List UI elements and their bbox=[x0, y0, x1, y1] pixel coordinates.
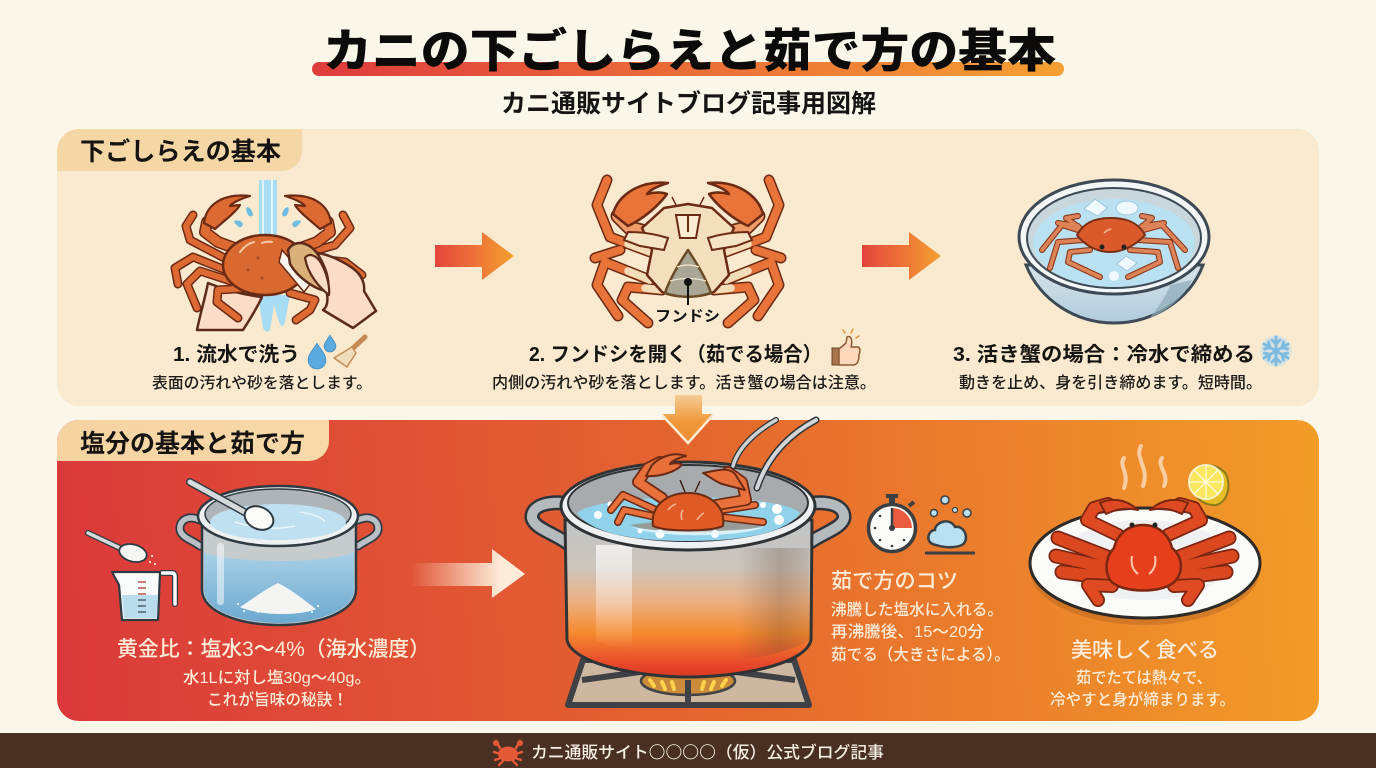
footer text: カニ通販サイト〇〇〇〇（仮）公式ブログ記事 bbox=[531, 739, 884, 763]
step 1 heading: 1. 流水で洗う bbox=[173, 343, 300, 366]
pot body bbox=[565, 520, 812, 677]
panel heading tab: 塩分: 塩分の基本と茹で方 bbox=[80, 430, 305, 458]
salt ratio heading: 黄金比：塩水3〜4%（海水濃度） bbox=[117, 638, 430, 661]
salt ratio description: 水1Lに対し塩30g〜40g。 bbox=[183, 669, 371, 687]
serving description: 冷やすと身が締まります。 bbox=[1050, 690, 1235, 709]
salt ratio description bbox=[183, 669, 371, 709]
crab shell in bowl bbox=[1077, 218, 1145, 252]
boiling tips heading: 茹で方のコツ bbox=[831, 570, 958, 593]
icon: snowflake bbox=[1260, 336, 1292, 366]
tongs bbox=[733, 420, 816, 488]
lemon bbox=[1189, 465, 1228, 505]
subtitle: カニ通販サイトブログ記事用図解 bbox=[501, 89, 876, 118]
step 3 heading: 3. 活き蟹の場合：冷水で締める bbox=[953, 343, 1255, 366]
crab in pot bbox=[611, 454, 765, 535]
icon: timer bbox=[868, 494, 916, 552]
arrow head outline bbox=[662, 415, 713, 443]
icon: brush bbox=[334, 337, 365, 367]
boiling water bbox=[577, 497, 800, 541]
left hand bbox=[197, 283, 262, 330]
icon: boiling bubbles bbox=[925, 496, 975, 553]
stove bbox=[568, 660, 809, 706]
right thumb bbox=[305, 255, 329, 295]
panel: 下ごしらえの基本 bbox=[57, 129, 1319, 406]
pot rim bbox=[561, 462, 815, 550]
illustration: crab in ice water bowl bbox=[1019, 180, 1209, 323]
crab shell bbox=[223, 235, 307, 295]
salt pile bbox=[240, 583, 316, 614]
arrow: prep panel down to boiling panel bbox=[662, 395, 713, 443]
ice cubes bbox=[1084, 199, 1107, 216]
illustration: washing crab under running water bbox=[175, 180, 376, 332]
title text: カニの下ごしらえと茹で方の基本 bbox=[323, 25, 1056, 77]
plate bbox=[1030, 515, 1260, 625]
illustration: measuring cup and small spoon bbox=[88, 533, 175, 620]
panel heading tab: 塩分 bbox=[57, 420, 329, 461]
step 1 description: 表面の汚れや砂を落とします。 bbox=[152, 374, 372, 392]
serving description: 茹でたては熱々で、 bbox=[1076, 669, 1212, 687]
boiling tips description: 再沸騰後、15〜20分 bbox=[831, 623, 984, 641]
arrow: step 2 to step 3 bbox=[862, 232, 941, 280]
apron pointer bbox=[684, 278, 692, 286]
brush bbox=[279, 250, 311, 292]
crab underside body bbox=[642, 204, 734, 296]
illustration: crab underside with apron bbox=[595, 180, 781, 325]
serving heading: 美味しく食べる bbox=[1071, 639, 1219, 662]
arrow: salt pot to boiling pot bbox=[410, 549, 525, 598]
serving description bbox=[1050, 669, 1235, 709]
arrow: step 1 to step 2 bbox=[435, 232, 514, 280]
icon: thumbs up bbox=[832, 329, 860, 365]
step 3 description: 動きを止め、身を引き締めます。短時間。 bbox=[959, 374, 1262, 392]
right hand bbox=[315, 253, 376, 328]
panel heading tab: 下ごしらえ: 下ごしらえの基本 bbox=[80, 137, 281, 166]
footer bar bbox=[0, 733, 1376, 768]
icon: footer crab bbox=[493, 740, 523, 765]
boiling tips description: 茹でる（大きさによる）。 bbox=[831, 646, 1010, 664]
illustration: boiling pot on stove bbox=[532, 420, 844, 706]
title bbox=[312, 25, 1064, 77]
steam bbox=[1122, 446, 1166, 488]
boiling tips description: 沸騰した塩水に入れる。 bbox=[831, 601, 1003, 619]
leg bases bbox=[628, 244, 748, 290]
plated crab shell bbox=[1107, 525, 1181, 590]
boiling tips description bbox=[831, 601, 1010, 664]
icon: water drops bbox=[308, 335, 336, 369]
spoon bbox=[190, 482, 248, 514]
illustration: salt water pot bbox=[180, 482, 378, 625]
step 2 description: 内側の汚れや砂を落とします。活き蟹の場合は注意。 bbox=[492, 374, 876, 392]
step 2 heading: 2. フンドシを開く（茹でる場合） bbox=[529, 343, 822, 366]
panel: 塩分の基本と茹で方 bbox=[57, 420, 1319, 721]
apron bbox=[665, 250, 711, 297]
salt ratio description: これが旨味の秘訣！ bbox=[207, 690, 348, 709]
illustration: plated crab with lemon and steam bbox=[1030, 446, 1260, 625]
panel heading tab: 下ごしらえ bbox=[57, 129, 302, 171]
apron label: フンドシ bbox=[655, 308, 720, 325]
title underline bar bbox=[312, 62, 1064, 76]
pot handles bbox=[532, 503, 582, 556]
